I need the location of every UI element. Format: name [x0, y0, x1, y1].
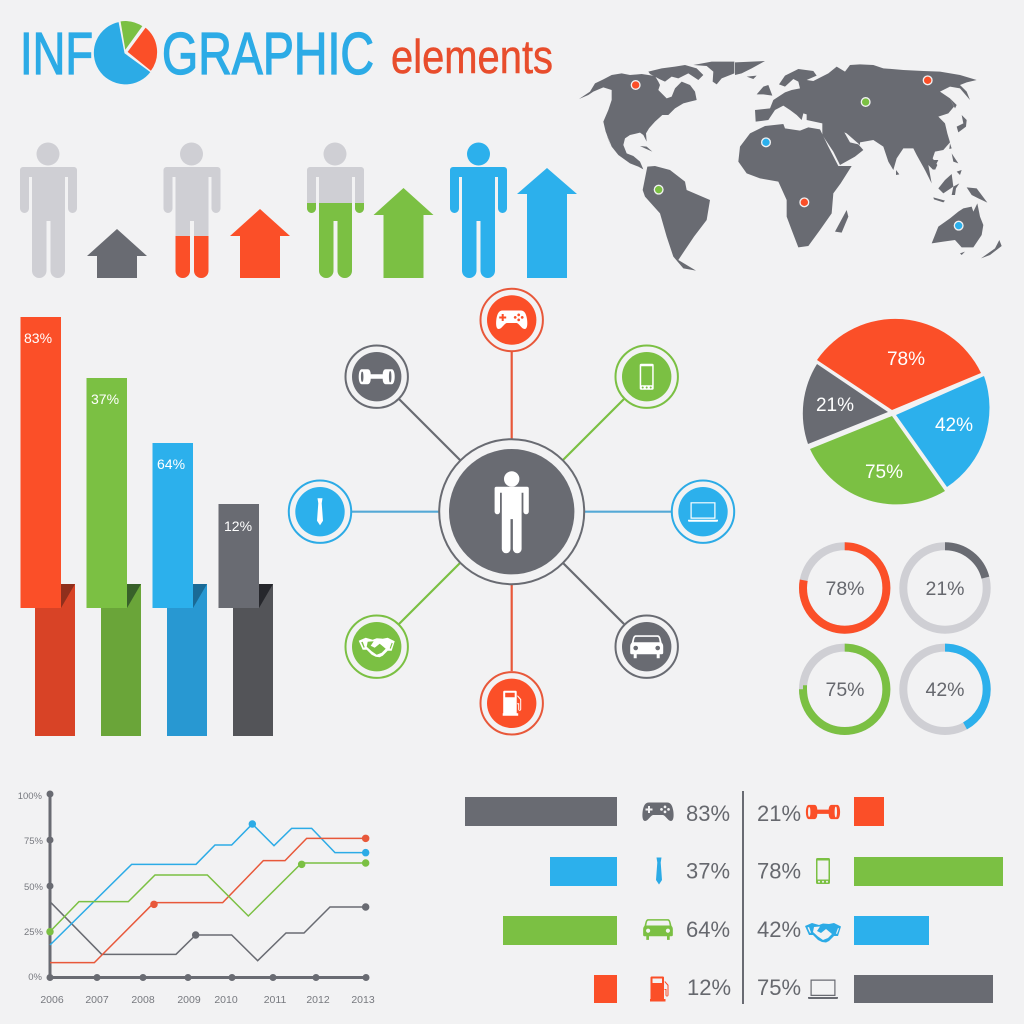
row: fuel pump 12% — [594, 975, 731, 1003]
slice: 78% — [817, 319, 981, 410]
line: red series — [50, 835, 369, 963]
donut: 78% — [803, 546, 886, 630]
row: dumbbell 21%: 21% — [757, 801, 801, 826]
x axis labels: 2008 — [131, 994, 155, 1006]
hub: centre person — [439, 439, 584, 584]
ribbon: red 83% — [20, 317, 75, 736]
pie labels — [816, 349, 973, 483]
node: fuel pump — [480, 672, 543, 734]
row: game controller 83% — [465, 797, 730, 826]
donut charts — [803, 546, 987, 731]
row: tie 37% — [550, 857, 730, 886]
node: phone — [616, 346, 678, 408]
donut: 78%: 78% — [825, 578, 865, 600]
x axis labels — [40, 994, 375, 1006]
row: car 64%: 64% — [686, 917, 730, 942]
slice: 42% — [896, 376, 989, 487]
node: handshake — [346, 616, 408, 678]
ribbon: red 83%: 83% — [24, 330, 52, 346]
pie labels: 21% — [816, 395, 854, 416]
landmass: Africa, South America, Madagascar — [643, 124, 852, 271]
ribbon: green 37%: 37% — [91, 391, 119, 407]
row: tie 37%: 37% — [686, 858, 730, 884]
row: laptop 75% — [757, 975, 993, 1003]
landmass: Europe, Asia and Atlantic islands — [735, 61, 977, 175]
divider — [742, 791, 744, 1004]
title word: GRAPHIC: GRAPHIC — [162, 21, 374, 87]
node: tie — [289, 480, 351, 543]
subtitle: elements: elements — [391, 30, 553, 83]
title — [20, 21, 553, 87]
pie labels: 78% — [887, 349, 925, 370]
y axis labels — [18, 791, 44, 983]
arrow: blue — [517, 168, 577, 278]
donut: 75% — [803, 648, 886, 731]
node: laptop — [672, 480, 734, 543]
map markers — [631, 76, 963, 230]
ribbon: blue 64%: 64% — [157, 456, 185, 472]
y axis labels: 50% — [24, 882, 44, 893]
person: green fill — [307, 142, 364, 278]
line: grey series — [50, 902, 369, 961]
donut: 21%: 21% — [925, 578, 965, 600]
node: dumbbell — [346, 346, 408, 408]
data lines — [47, 821, 369, 963]
connectors — [352, 352, 671, 671]
people with arrows — [20, 142, 577, 278]
arrow: green — [374, 188, 434, 278]
x axis labels: 2006 — [40, 994, 64, 1006]
horizontal bars: right — [757, 797, 1003, 1003]
donut: 21% — [903, 546, 987, 630]
slice: 75% — [810, 416, 945, 504]
pie labels: 75% — [865, 462, 903, 483]
y axis labels: 75% — [24, 836, 44, 847]
ribbon: grey 12% — [218, 504, 273, 736]
row: game controller 83%: 83% — [686, 801, 730, 826]
row: dumbbell 21% — [757, 797, 884, 826]
node: car — [616, 616, 678, 678]
ribbon bar chart — [20, 317, 273, 736]
y axis labels: 25% — [24, 927, 44, 938]
person: grey — [20, 142, 77, 278]
row: handshake 42% — [757, 916, 929, 945]
donut: 75%: 75% — [825, 679, 865, 701]
x axis labels: 2011 — [264, 994, 286, 1006]
row: handshake 42%: 42% — [757, 917, 801, 942]
hub diagram — [289, 289, 734, 734]
arrow: dark — [87, 229, 147, 278]
landmass: South-East Asia and Oceania — [922, 160, 1002, 258]
pie labels: 42% — [935, 415, 973, 436]
landmass: the Americas north — [579, 62, 734, 169]
row: phone 78% — [757, 857, 1003, 886]
slice: 21% — [803, 364, 888, 444]
x axis labels: 2012 — [306, 994, 330, 1006]
line chart — [18, 790, 375, 1006]
line: green series — [47, 860, 369, 935]
person: red fill — [164, 142, 220, 278]
donut: 42% — [903, 648, 987, 731]
donut: 42%: 42% — [925, 679, 965, 701]
icon: title pie as letter O — [93, 21, 158, 85]
y axis labels: 0% — [28, 972, 43, 983]
row: laptop 75%: 75% — [757, 975, 801, 1000]
x axis labels: 2010 — [214, 994, 238, 1006]
world map — [579, 61, 1002, 271]
node: game controller — [480, 289, 543, 351]
x axis labels: 2009 — [177, 994, 201, 1006]
x axis labels: 2013 — [351, 994, 375, 1006]
ribbon: grey 12%: 12% — [224, 518, 252, 534]
arrow: red — [230, 209, 290, 278]
title word: INF: INF — [20, 21, 93, 87]
line: blue series — [50, 821, 369, 945]
person: blue — [450, 142, 507, 278]
row: fuel pump 12%: 12% — [687, 975, 731, 1000]
pie chart — [803, 319, 989, 504]
horizontal bars: left — [465, 797, 731, 1003]
ribbon: green 37% — [86, 378, 141, 736]
x axis labels: 2007 — [85, 994, 109, 1006]
row: phone 78%: 78% — [757, 858, 801, 884]
ribbon: blue 64% — [152, 443, 207, 736]
row: car 64% — [503, 916, 730, 945]
axes — [46, 790, 370, 981]
y axis labels: 100% — [18, 791, 43, 802]
